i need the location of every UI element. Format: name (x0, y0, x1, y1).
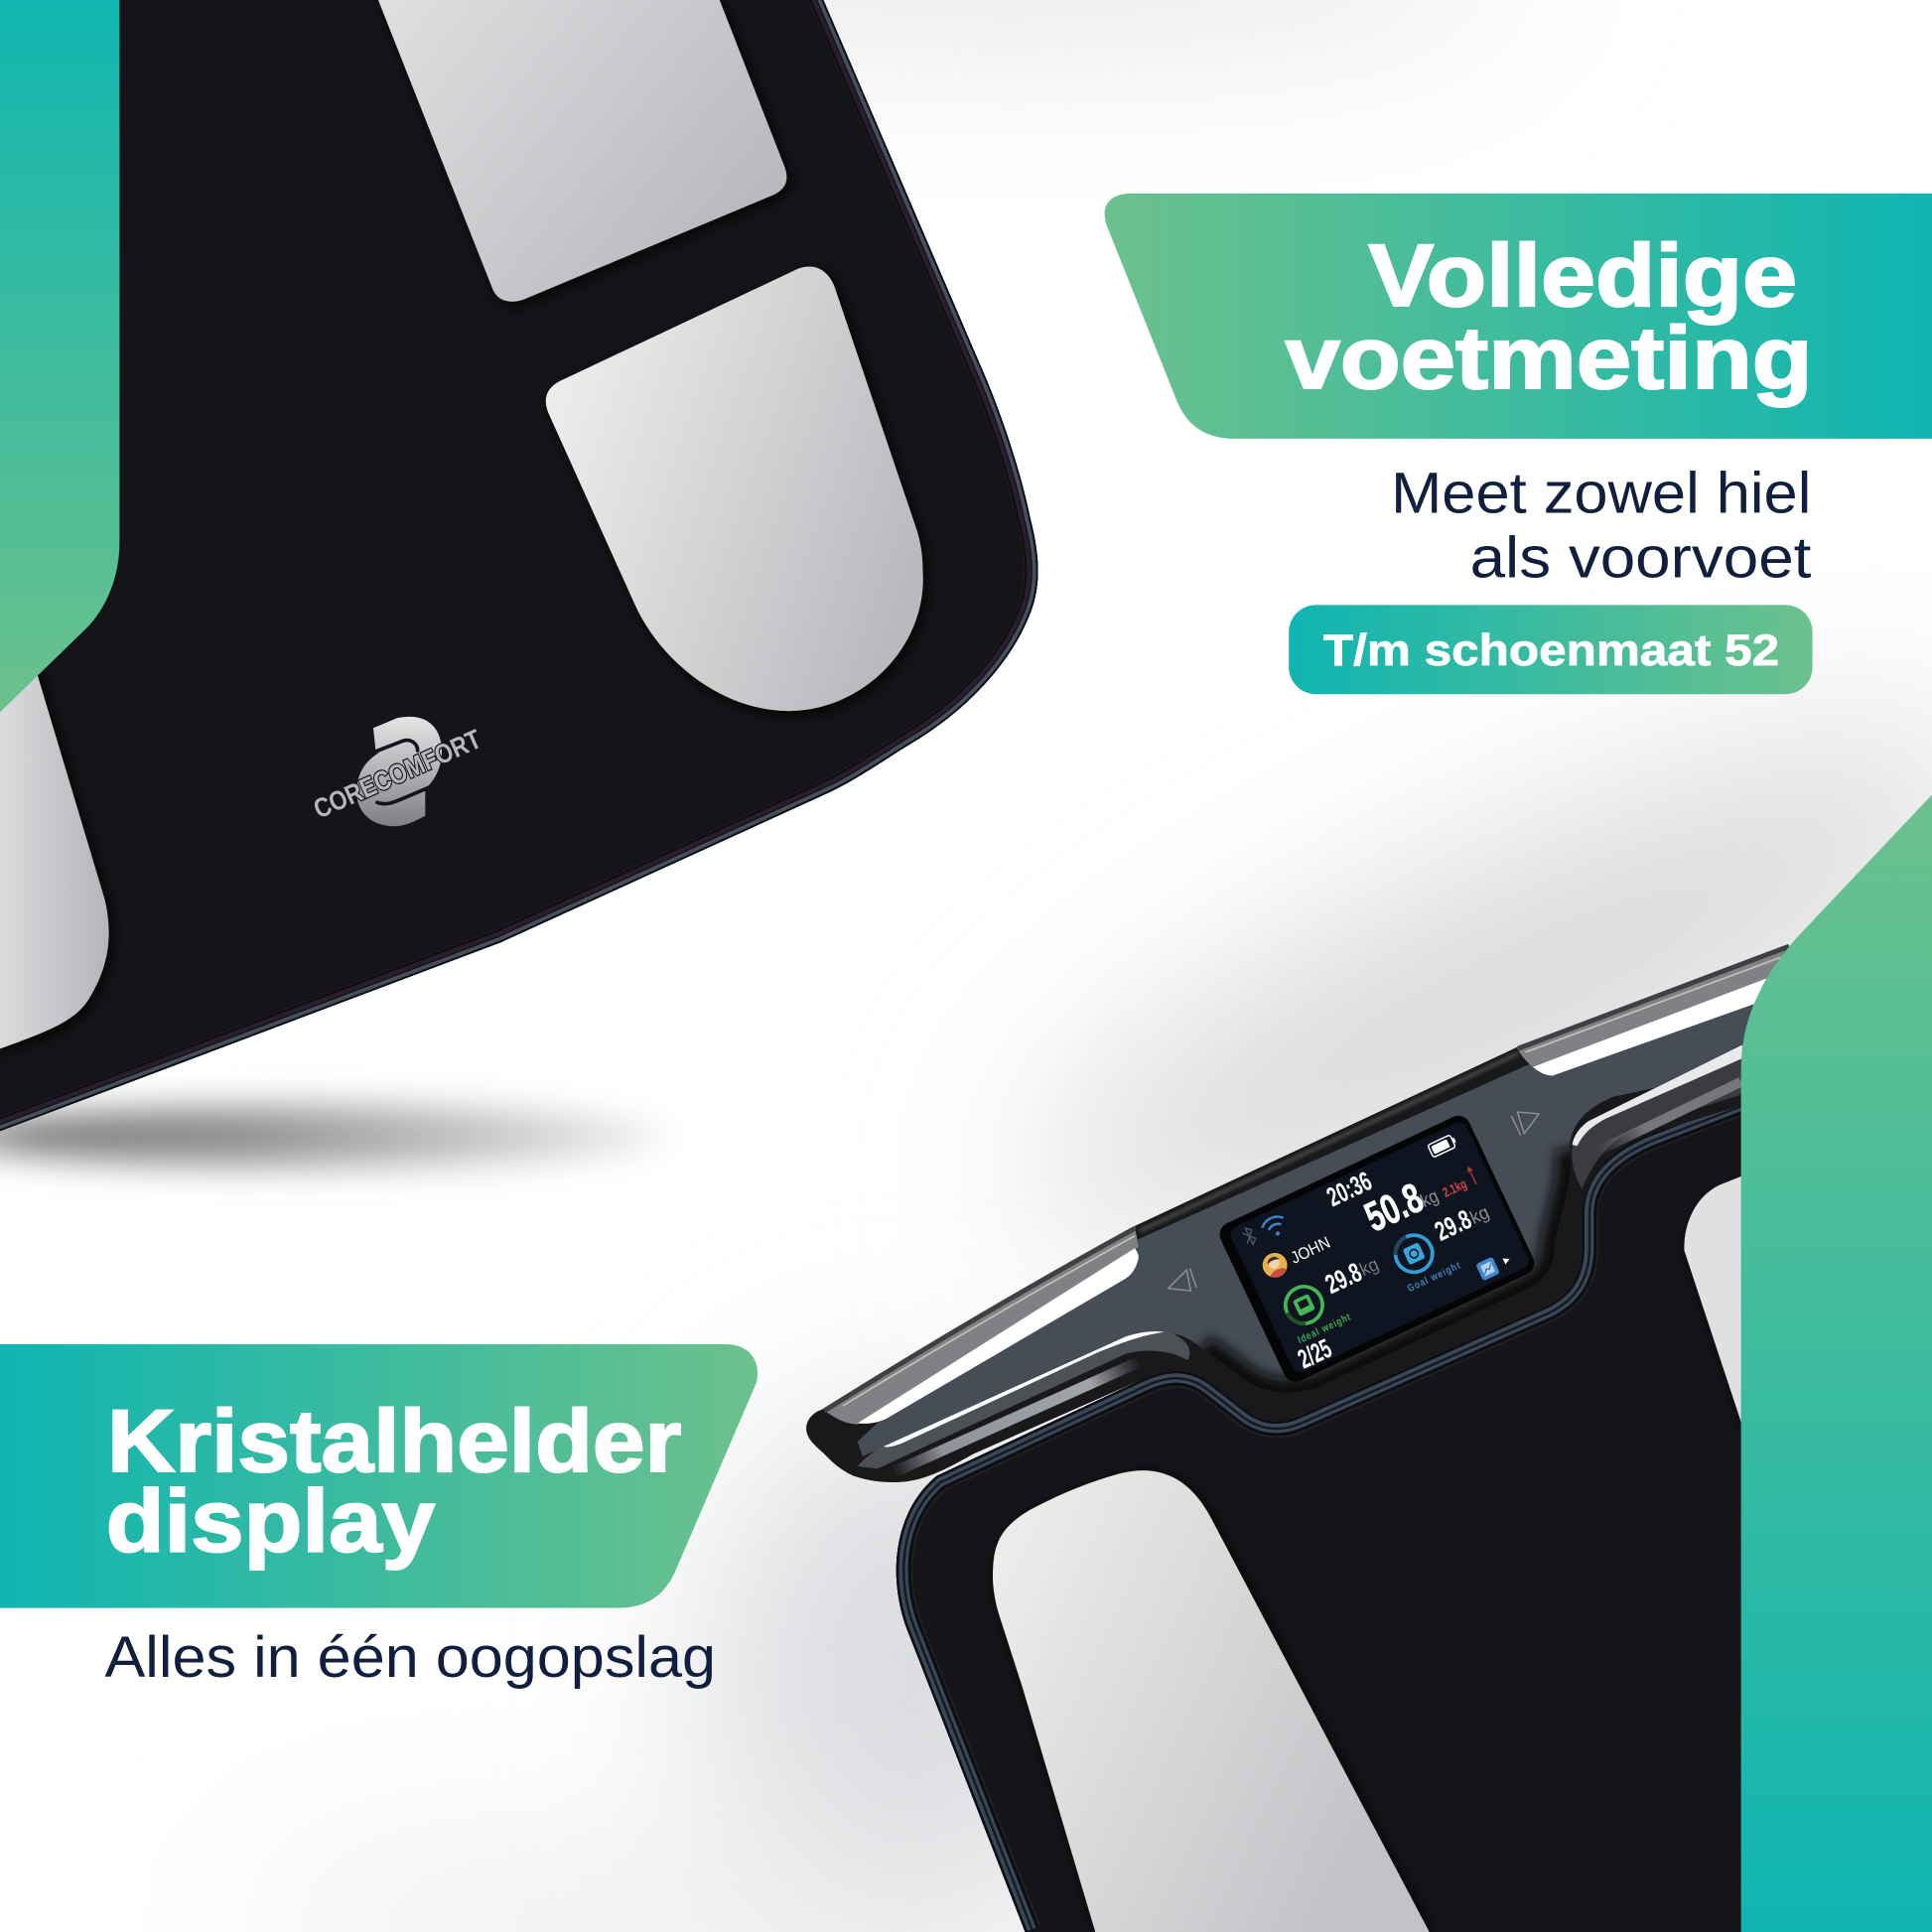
screen frame (1215, 1112, 1538, 1386)
heading: display (106, 1471, 435, 1571)
ideal value: 29.8 (1320, 1256, 1366, 1300)
chrome: left inner rim (858, 1330, 1189, 1468)
screen surface (1228, 1120, 1532, 1375)
icon: goal ring (1389, 1229, 1439, 1279)
text block: Meet zowel hiel als voorvoet: als voorvoet (1470, 525, 1811, 590)
accent band: right (1741, 794, 1932, 1932)
foot pad: heel large (546, 267, 923, 711)
icon: ideal ring (1280, 1281, 1328, 1329)
heading (1285, 225, 1813, 407)
icon: left arrow button (1169, 1268, 1196, 1291)
foot pad: lower scale large (993, 1470, 1430, 1932)
icon: avatar (1259, 1249, 1292, 1282)
goal unit: kg (1466, 1201, 1492, 1228)
panel: Kristalhelder display (0, 1344, 758, 1608)
goal value: 29.8 (1430, 1203, 1476, 1247)
text block: Alles in één oogopslag: Alles in één oogopslag (104, 1625, 716, 1690)
weight reading: 50.8 (1357, 1173, 1430, 1241)
banner shape (1105, 194, 1932, 439)
user name: JOHN (1288, 1233, 1333, 1268)
icon: bluetooth (1241, 1226, 1258, 1247)
callout: T/m schoenmaat 52: T/m schoenmaat 52 (1323, 626, 1779, 675)
weight delta: 2.1kg (1441, 1176, 1469, 1200)
chrome: right inner rim (1572, 1043, 1742, 1189)
banner shape (0, 1344, 758, 1608)
heading: voetmeting (1285, 308, 1813, 407)
black strip highlight (1140, 1053, 1518, 1231)
weight unit: kg (1417, 1184, 1442, 1211)
accent band: top-left (0, 0, 119, 712)
scale: lower-right body (896, 1105, 1741, 1932)
shadow under top scale (0, 1106, 665, 1166)
heading: Volledige (1368, 225, 1797, 325)
grey panel (858, 979, 1766, 1456)
logo: CoreComfort (309, 717, 485, 826)
scale: top-left body (0, 0, 1072, 1159)
scale screen (1215, 1112, 1538, 1386)
icon: wifi (1260, 1213, 1290, 1240)
bar silhouette (806, 945, 1789, 1482)
heading: Kristalhelder (107, 1391, 681, 1490)
foot pad: upper toe (376, 0, 786, 302)
chrome: right white highlight (1533, 978, 1767, 1075)
icon: chart tile (1475, 1257, 1500, 1281)
ideal label: Ideal weight (1296, 1311, 1353, 1346)
text block: Meet zowel hiel als voorvoet (1391, 461, 1811, 590)
heading (106, 1391, 681, 1571)
icon: red arrow (1466, 1167, 1478, 1185)
panel: Volledige voetmeting (1105, 194, 1932, 439)
text block: Meet zowel hiel als voorvoet: Meet zowel hiel (1391, 461, 1811, 525)
ideal unit: kg (1356, 1253, 1382, 1280)
icon: battery (1428, 1134, 1457, 1158)
goal label: Goal weight (1406, 1259, 1463, 1295)
chrome: left top band (823, 1226, 1139, 1425)
chrome: left white highlight (858, 1248, 1139, 1424)
callout: T/m schoenmaat 52 (1289, 605, 1813, 694)
icon: play triangle (1503, 1256, 1511, 1265)
date: 2/25 (1293, 1332, 1336, 1374)
chrome: right top band (1517, 945, 1789, 1067)
icon: right arrow button (1511, 1112, 1539, 1135)
display console bar (806, 936, 1811, 1482)
foot pad: lower left (0, 617, 109, 1051)
foot pad: right sliver (1684, 1173, 1749, 1448)
logo wordmark: CORECOMFORT (309, 723, 485, 824)
time: 20:36 (1322, 1166, 1376, 1212)
